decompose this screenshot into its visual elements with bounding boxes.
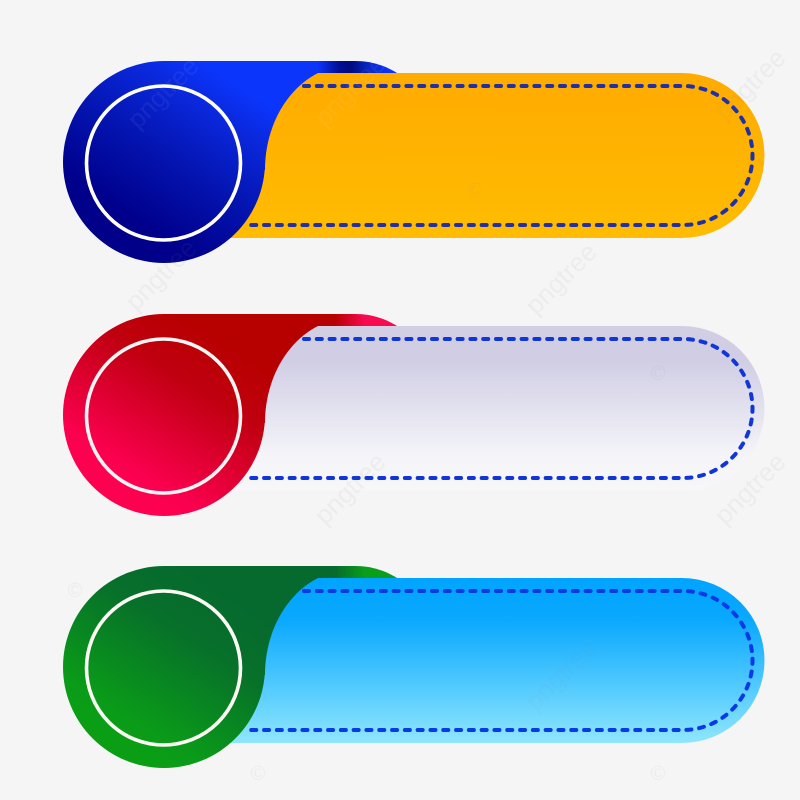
- dashed outline: [247, 339, 752, 478]
- white ring: [86, 86, 240, 240]
- dashed outline: [247, 591, 752, 730]
- watermarks: pngtree: [119, 233, 203, 316]
- watermarks: pngtree: [519, 237, 603, 320]
- white ring: [86, 339, 240, 493]
- watermarks: ©: [651, 763, 666, 785]
- blue tab body: [164, 61, 320, 200]
- watermarks: pngtree: [708, 447, 792, 530]
- blue tab tip: [318, 61, 400, 75]
- watermarks: ©: [68, 580, 83, 602]
- watermarks: pngtree: [308, 447, 392, 530]
- dashed outline: [247, 86, 752, 225]
- blue circle: [63, 61, 265, 263]
- banner: red and lavender: [63, 314, 764, 516]
- orange bar: [225, 73, 764, 238]
- green tab body: [164, 566, 336, 705]
- banner: green and sky blue: [63, 566, 764, 768]
- banner: blue and orange: [63, 61, 764, 263]
- red tab body: [164, 314, 336, 453]
- watermarks: pngtree: [519, 633, 603, 716]
- lavender bar: [225, 326, 764, 491]
- watermarks: ©: [651, 363, 666, 385]
- watermarks: pngtree: [121, 51, 205, 134]
- watermarks: ©: [468, 180, 483, 202]
- watermarks: pngtree: [708, 43, 792, 126]
- green tab tip: [335, 566, 400, 580]
- watermarks: pngtree: [308, 49, 392, 132]
- green circle: [63, 566, 265, 768]
- sky blue bar: [225, 578, 764, 743]
- white ring: [86, 591, 240, 745]
- watermarks: ©: [251, 763, 266, 785]
- red tab tip: [335, 314, 400, 328]
- red circle: [63, 314, 265, 516]
